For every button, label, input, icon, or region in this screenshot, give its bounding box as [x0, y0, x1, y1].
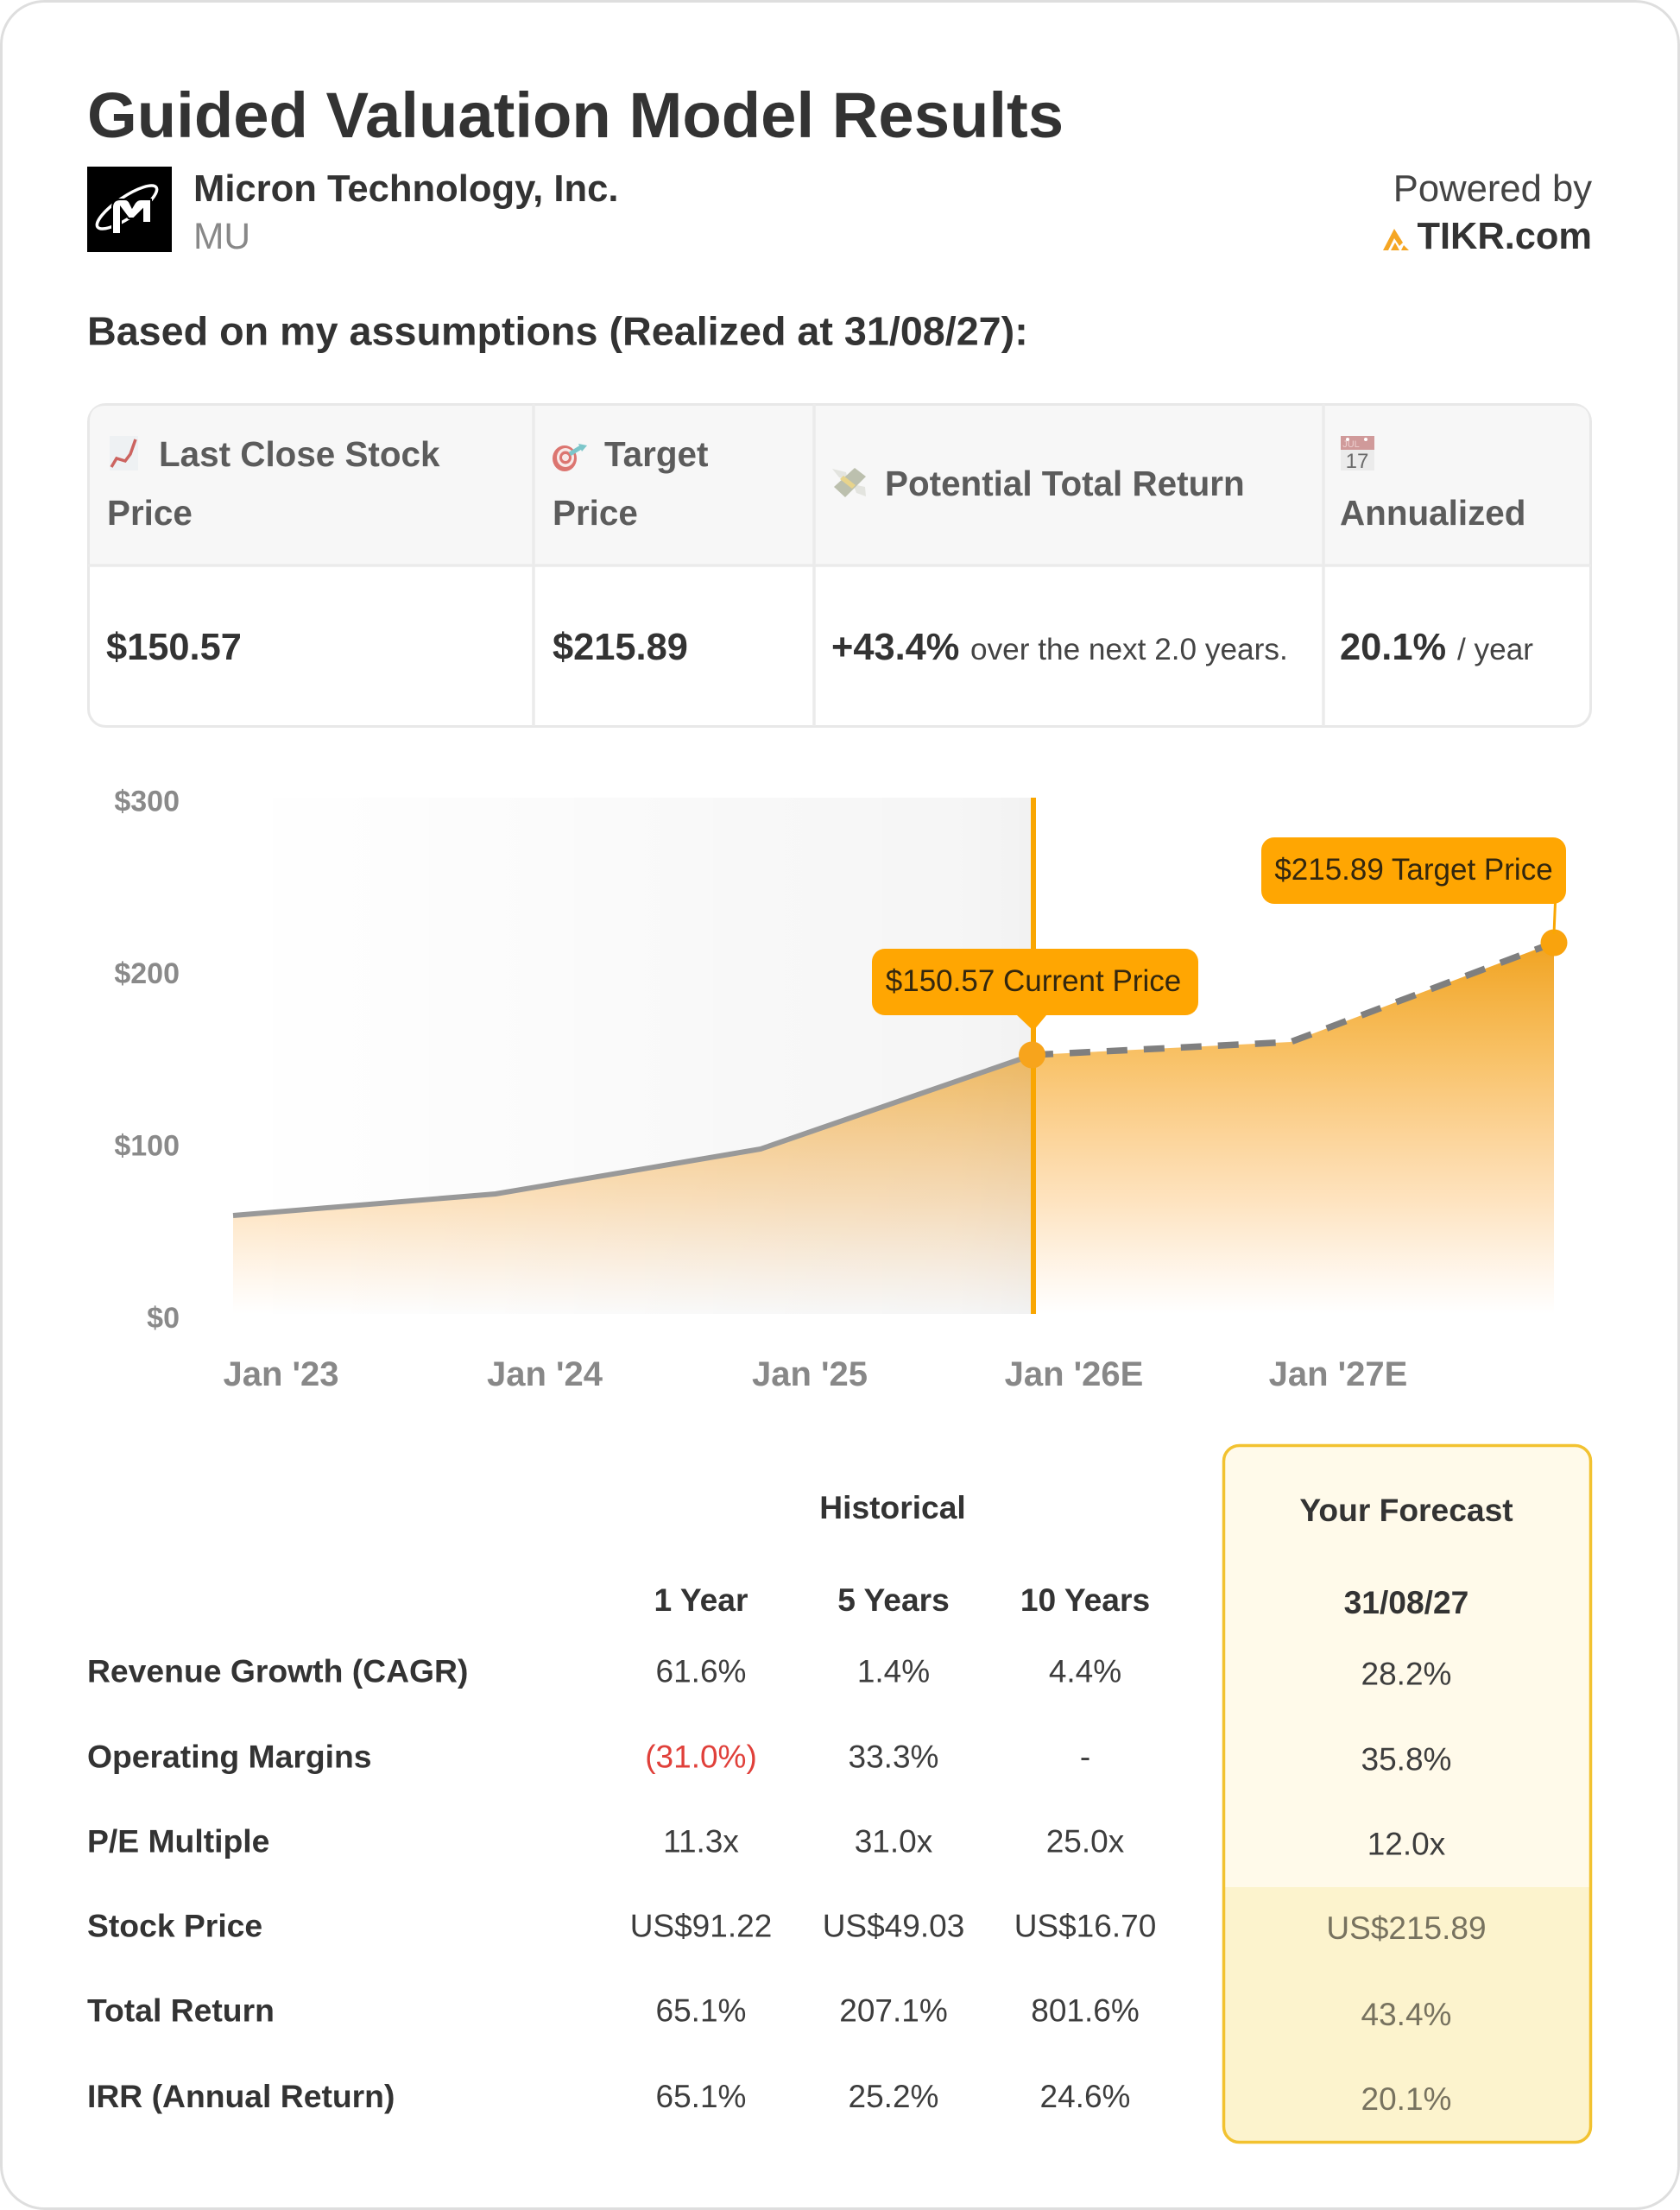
row: IRR: IRR (Annual Return) [87, 2078, 395, 2114]
x axis labels [223, 1355, 1407, 1393]
chart: price history and forecast [114, 786, 1568, 1393]
row: operating margins: - [1080, 1739, 1090, 1775]
row: IRR: 25.2% [849, 2079, 938, 2114]
ticker: MU [193, 217, 250, 257]
current date marker line [1031, 798, 1036, 1314]
header label: Annualized [1340, 493, 1525, 533]
value: over the next 2.0 years. [970, 633, 1288, 666]
company header [87, 167, 618, 257]
x axis labels: Jan '25 [752, 1355, 868, 1393]
row: stock price: Stock Price [87, 1908, 262, 1944]
subheading: Based on my assumptions (Realized at 31/08/27): [87, 309, 1028, 354]
x axis labels: Jan '26E [1005, 1355, 1143, 1393]
panel: forecast highlight [1224, 1445, 1590, 2143]
value: $215.89 [553, 627, 688, 668]
y axis labels: $300 [114, 786, 180, 818]
forecast values: 43.4% [1361, 1997, 1451, 2032]
target leader line [1554, 902, 1556, 934]
price area [233, 943, 1554, 1314]
row: total return [87, 1992, 1140, 2029]
column: target price [553, 434, 708, 668]
row: P/E multiple [87, 1823, 1125, 1860]
historical price line [233, 1055, 1033, 1216]
icon: calendar [1341, 436, 1374, 473]
header label: Price [553, 493, 638, 533]
current price dot [1019, 1041, 1045, 1069]
callout: target price: $215.89 Target Price [1274, 853, 1553, 887]
panel: summary table [88, 404, 1591, 727]
header label: Price [107, 493, 193, 533]
column: annualized [1340, 436, 1533, 668]
icon: calendar: JUL [1342, 439, 1360, 450]
forecast date: 31/08/27 [1344, 1584, 1468, 1620]
row: total return: 65.1% [656, 1992, 746, 2029]
callout: current price [872, 949, 1198, 1031]
row: IRR [87, 2078, 1130, 2114]
forecast values [1326, 1656, 1487, 2117]
value: +43.4% [831, 627, 959, 668]
value: / year [1457, 633, 1533, 666]
forecast dashed line [1033, 943, 1554, 1055]
row: IRR: 24.6% [1040, 2079, 1130, 2114]
icon: calendar: 17 [1346, 450, 1368, 473]
row: stock price: US$16.70 [1014, 1908, 1156, 1944]
value: 20.1% [1340, 627, 1446, 668]
x axis labels: Jan '24 [487, 1355, 603, 1393]
column headers: 10 Years [1020, 1582, 1150, 1618]
column headers: 1 Year [654, 1582, 748, 1618]
forecast values: US$215.89 [1326, 1910, 1487, 1946]
forecast values: 20.1% [1361, 2081, 1451, 2117]
row: revenue growth: 1.4% [857, 1654, 930, 1689]
row: operating margins: 33.3% [849, 1739, 938, 1775]
header label: Target [604, 434, 708, 474]
y axis labels [114, 786, 180, 1335]
row: P/E multiple: 25.0x [1046, 1823, 1125, 1860]
forecast values: 12.0x [1367, 1827, 1446, 1861]
row: stock price: US$91.22 [630, 1908, 772, 1944]
icon: Micron logo [87, 167, 172, 252]
row: total return: 207.1% [839, 1992, 948, 2029]
row: revenue growth: 61.6% [656, 1654, 746, 1689]
callout: target price [1261, 837, 1566, 904]
row: revenue growth [87, 1652, 1121, 1689]
row: operating margins: (31.0%) [645, 1739, 757, 1775]
row: revenue growth: Revenue Growth (CAGR) [87, 1652, 468, 1689]
icon: target dart [553, 444, 587, 471]
row: total return: Total Return [87, 1992, 275, 2029]
forecast values: 35.8% [1361, 1742, 1451, 1777]
forecast header: Your Forecast [1299, 1492, 1513, 1528]
historical header: Historical [819, 1489, 966, 1525]
x axis labels: Jan '23 [223, 1355, 339, 1393]
title: Guided Valuation Model Results [87, 79, 1064, 151]
value: $150.57 [106, 627, 242, 668]
header label: Potential Total Return [885, 464, 1245, 503]
target price dot [1540, 929, 1568, 957]
TIKR wordmark: TIKR.com [1417, 216, 1592, 257]
row: P/E multiple: P/E Multiple [87, 1823, 269, 1860]
y axis labels: $200 [114, 957, 180, 990]
icon: chart increasing [110, 436, 138, 470]
row: IRR: 65.1% [656, 2079, 746, 2114]
row: stock price: US$49.03 [823, 1908, 964, 1944]
column headers: 5 Years [837, 1582, 950, 1618]
panel: historical table [87, 1489, 1156, 2114]
row: P/E multiple: 11.3x [663, 1823, 739, 1860]
column: last close stock price [106, 434, 440, 668]
callout: current price: $150.57 Current Price [886, 964, 1181, 998]
row: total return: 801.6% [1031, 1992, 1140, 2029]
row: P/E multiple: 31.0x [855, 1823, 933, 1860]
row: operating margins: Operating Margins [87, 1739, 371, 1775]
powered by TIKR [1383, 168, 1592, 257]
powered by label: Powered by [1393, 168, 1592, 210]
y axis labels: $0 [147, 1302, 180, 1335]
historical shading [233, 798, 1033, 1314]
column: potential total return [831, 464, 1288, 668]
header label: Last Close Stock [159, 434, 440, 474]
row: operating margins [87, 1739, 1090, 1775]
y axis labels: $100 [114, 1129, 180, 1162]
x axis labels: Jan '27E [1269, 1355, 1407, 1393]
row: stock price [87, 1908, 1156, 1944]
icon: money with wings [832, 468, 866, 497]
icon: TIKR logo [1383, 229, 1409, 250]
column headers [654, 1582, 1150, 1618]
row: revenue growth: 4.4% [1049, 1654, 1121, 1689]
forecast values: 28.2% [1361, 1656, 1451, 1692]
company name: Micron Technology, Inc. [193, 168, 618, 210]
